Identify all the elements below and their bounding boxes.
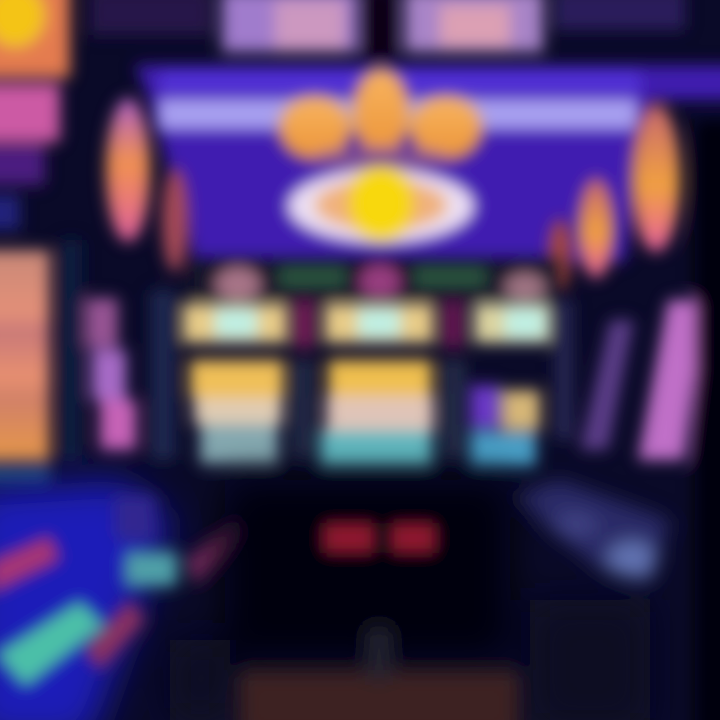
panel: right side lamps <box>549 104 680 291</box>
panel: top-left machine lights <box>0 0 70 230</box>
icon: emblem oval with yellow centre <box>287 167 475 244</box>
icon: crown of three orange lobes <box>279 68 482 172</box>
lower left buttons <box>0 495 250 688</box>
panel: strip above reels <box>190 258 560 303</box>
panel: top lights <box>90 0 685 60</box>
panel: central dark cabinet <box>170 480 650 720</box>
panel: right machine columns <box>555 120 720 720</box>
icon: red buttons <box>323 523 436 553</box>
panel: right reel <box>470 303 552 466</box>
panel: left inner column <box>60 240 176 460</box>
panel: left machine stripes <box>0 250 50 484</box>
panel: floor <box>238 625 520 720</box>
panel: left reel <box>182 303 288 464</box>
panel: lower right console <box>510 480 670 585</box>
reel dividers <box>292 300 466 460</box>
panel: lower left console <box>0 480 170 720</box>
panel: centre reel <box>320 303 434 466</box>
banner light stripe <box>158 98 638 130</box>
panel: left side lamps <box>106 98 188 272</box>
panel: blue top banner <box>135 65 720 262</box>
